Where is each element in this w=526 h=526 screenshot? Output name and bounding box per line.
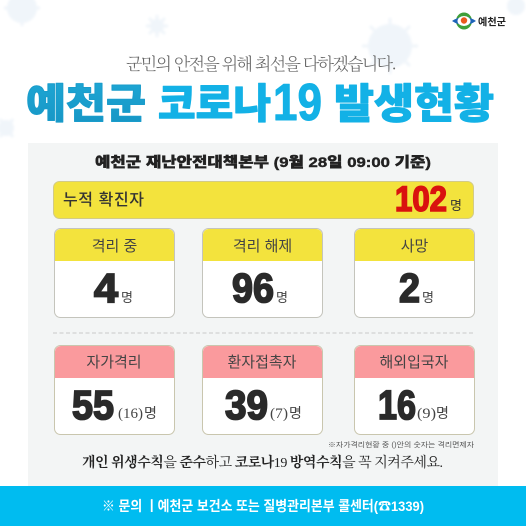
card: patient contacts: (7) [270, 406, 288, 422]
card: released: 명 [276, 290, 288, 305]
card: deaths [354, 228, 474, 318]
logo: Yecheon county [452, 12, 506, 30]
card: overseas arrivals: (9) [417, 406, 436, 422]
card: in isolation: 명 [121, 290, 133, 305]
footer: contact [0, 486, 526, 526]
card: in isolation: 4 [94, 265, 118, 311]
card: patient contacts: 명 [289, 405, 302, 421]
footnote: ※자가격리현황 중 ()안의 숫자는 격리면제자 [328, 440, 475, 449]
cumulative confirmed bar: 명 [450, 198, 462, 213]
cumulative confirmed bar [54, 180, 474, 219]
decorative virus background [0, 0, 525, 137]
card: overseas arrivals: 해외입국자 [379, 354, 449, 371]
main title: 코로나 [158, 81, 271, 127]
subtitle handwriting: 군민의 안전을 위해 최선을 다하겠습니다. [126, 50, 397, 75]
card: self-quarantine: 55 [72, 382, 114, 428]
card: released: 격리 해제 [233, 238, 292, 255]
card: patient contacts: 39 [225, 382, 268, 428]
card: released [202, 228, 322, 318]
card: released: 96 [232, 265, 274, 311]
card: overseas arrivals [354, 346, 474, 434]
card: self-quarantine: 자가격리 [86, 354, 142, 371]
main title [26, 74, 494, 132]
panel: status [28, 143, 498, 486]
card: in isolation [54, 228, 174, 318]
card: deaths: 2 [399, 265, 420, 311]
logo: Yecheon county: 예천군 [478, 16, 506, 28]
footer: contact: ※ 문의 ㅣ예천군 보건소 또는 질병관리본부 콜센터(☎1339) [102, 498, 424, 514]
card: patient contacts [202, 346, 322, 434]
main title: 예천군 [26, 81, 146, 127]
hygiene notice: 개인 위생수칙을 준수하고 코로나19 방역수칙을 꼭 지켜주세요. [82, 454, 443, 471]
card: self-quarantine: 명 [144, 405, 157, 421]
card: overseas arrivals: 16 [378, 382, 416, 428]
panel heading: 예천군 재난안전대책본부 (9월 28일 09:00 기준) [95, 154, 431, 170]
card: in isolation: 격리 중 [92, 238, 137, 255]
card: self-quarantine [54, 346, 174, 434]
main title: 발생현황 [334, 81, 494, 127]
card: overseas arrivals: 명 [436, 405, 449, 421]
card: patient contacts: 환자접촉자 [227, 354, 297, 371]
card: deaths: 사망 [401, 238, 428, 255]
card: deaths: 명 [422, 290, 434, 305]
card: self-quarantine: (16) [118, 406, 143, 422]
main title: 19 [273, 74, 322, 132]
cumulative confirmed bar: 102 [395, 180, 447, 219]
cumulative confirmed bar: 누적 확진자 [63, 191, 144, 209]
